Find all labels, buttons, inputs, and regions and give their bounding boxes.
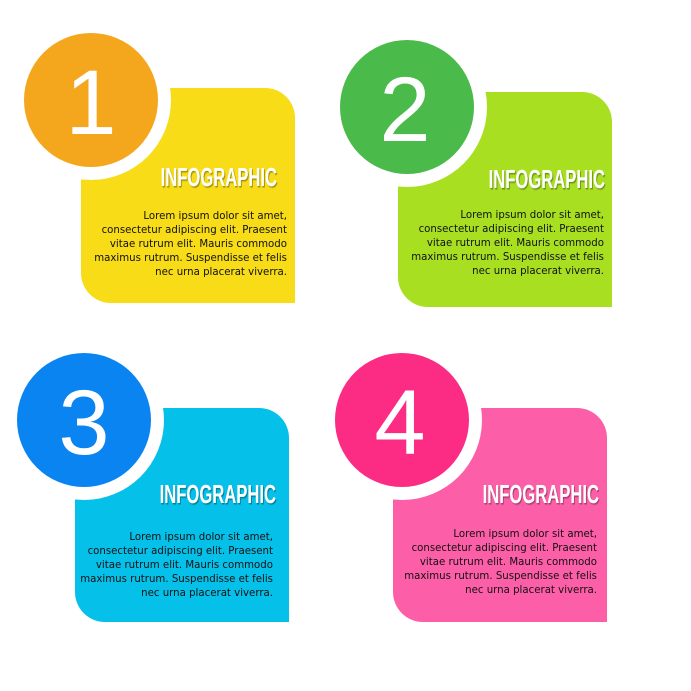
text 3: nec urna placerat viverra. [141, 588, 273, 599]
text 2: nec urna placerat viverra. [472, 266, 604, 277]
panel: step 3 [4, 340, 289, 622]
heading 1: INFOGRAPHIC [161, 162, 277, 192]
badge 3 [17, 353, 151, 487]
text 2: maximus rutrum. Suspendisse et felis [411, 252, 604, 263]
card 3 [75, 408, 289, 622]
badge 1: 1 [65, 52, 117, 154]
badge 4 [335, 353, 469, 487]
card 2 [398, 92, 612, 307]
text 2: consectetur adipiscing elit. Praesent [419, 224, 604, 235]
badge 3: 3 [58, 372, 110, 474]
text 4: nec urna placerat viverra. [465, 585, 597, 596]
panel: step 1 [11, 20, 295, 303]
text 3: maximus rutrum. Suspendisse et felis [80, 574, 273, 585]
badge 4: 4 [374, 372, 426, 474]
badge 2: 2 [379, 59, 431, 161]
badge 2 [340, 40, 474, 174]
heading 2: INFOGRAPHIC [489, 164, 605, 194]
card 1 [81, 88, 295, 303]
text 1: nec urna placerat viverra. [155, 267, 287, 278]
text 4: consectetur adipiscing elit. Praesent [412, 543, 597, 554]
text 1: Lorem ipsum dolor sit amet, [143, 211, 287, 222]
card 4 [393, 408, 607, 622]
text 1: consectetur adipiscing elit. Praesent [102, 225, 287, 236]
heading 3: INFOGRAPHIC [160, 479, 276, 509]
text 1: vitae rutrum elit. Mauris commodo [110, 239, 287, 250]
text 3: vitae rutrum elit. Mauris commodo [96, 560, 273, 571]
text 4: vitae rutrum elit. Mauris commodo [420, 557, 597, 568]
text 4: maximus rutrum. Suspendisse et felis [404, 571, 597, 582]
panel: step 2 [327, 27, 612, 307]
text 4: Lorem ipsum dolor sit amet, [453, 529, 597, 540]
panel: step 4 [322, 340, 607, 622]
text 2: Lorem ipsum dolor sit amet, [460, 210, 604, 221]
badge 1 [24, 33, 158, 167]
text 1: maximus rutrum. Suspendisse et felis [94, 253, 287, 264]
text 3: consectetur adipiscing elit. Praesent [88, 546, 273, 557]
text 2: vitae rutrum elit. Mauris commodo [427, 238, 604, 249]
heading 4: INFOGRAPHIC [483, 479, 599, 509]
text 3: Lorem ipsum dolor sit amet, [129, 532, 273, 543]
